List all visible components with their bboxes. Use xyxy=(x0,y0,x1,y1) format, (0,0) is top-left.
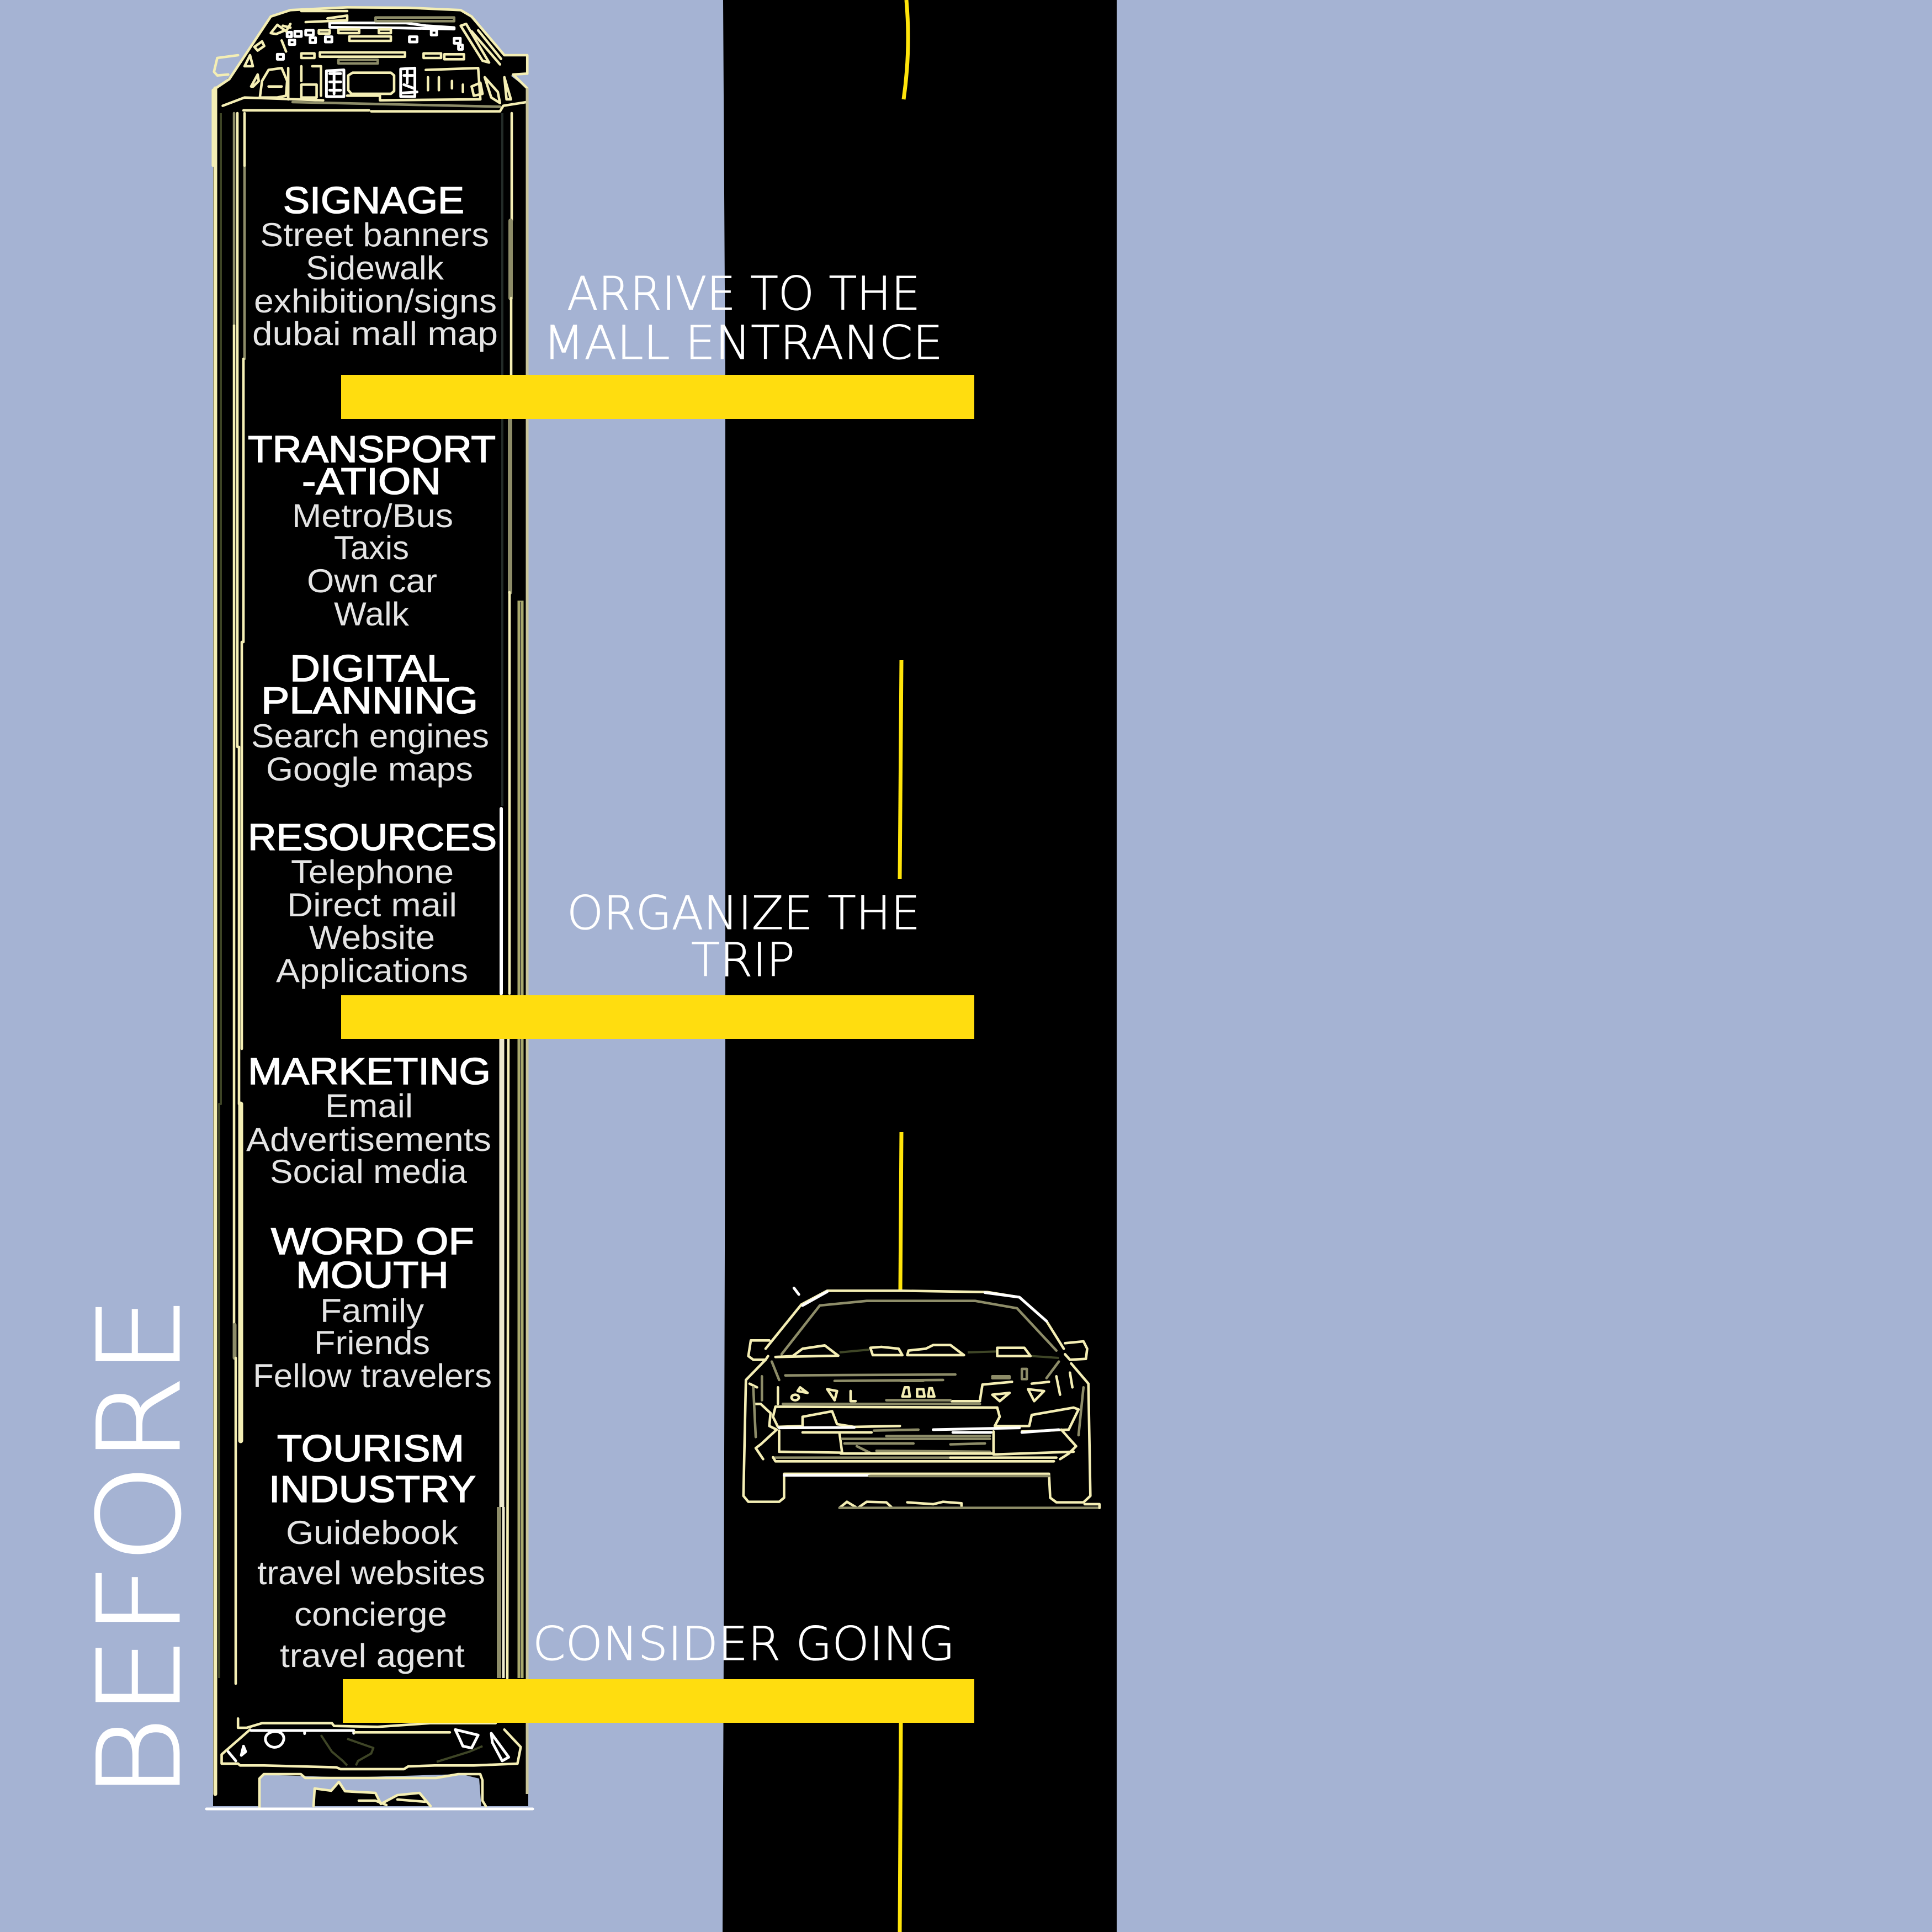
stage label: arrive to the mall entrance: MALL ENTRANCE xyxy=(543,316,943,370)
text block: word of mouth: MOUTH xyxy=(296,1254,449,1296)
text block: word of mouth: Fellow travelers xyxy=(253,1357,492,1394)
text block: signage: Sidewalk xyxy=(306,250,444,286)
text block: resources: Website xyxy=(309,919,435,956)
text block: marketing: Social media xyxy=(270,1153,468,1190)
text block: tourism industry: concierge xyxy=(294,1596,447,1633)
side title: before: BEFORE xyxy=(75,1296,206,1800)
icon: car outline seen from the front xyxy=(744,1288,1100,1508)
text block: resources: RESOURCES xyxy=(248,816,497,858)
text block: resources: Direct mail xyxy=(287,887,457,923)
text block: signage: SIGNAGE xyxy=(283,179,464,221)
stage label: organize the trip: TRIP xyxy=(691,933,795,987)
bus roof and windscreen details xyxy=(213,7,527,166)
text block: marketing: Advertisements xyxy=(246,1121,491,1158)
text block: digital planning: Google maps xyxy=(266,751,473,788)
text block: tourism industry: travel agent xyxy=(280,1637,465,1674)
text block: resources xyxy=(248,816,497,989)
text block: resources: Applications xyxy=(276,952,468,989)
yellow bar: organize xyxy=(341,995,974,1039)
bus ground line xyxy=(206,1807,533,1811)
text block: marketing xyxy=(246,1050,491,1190)
text block: tourism industry: Guidebook xyxy=(286,1514,459,1551)
text block: marketing: MARKETING xyxy=(248,1050,491,1092)
text block: word of mouth: Friends xyxy=(314,1324,430,1361)
text block: word of mouth: WORD OF xyxy=(271,1220,474,1262)
text block: word of mouth xyxy=(253,1220,492,1394)
text block: signage: dubai mall map xyxy=(252,315,498,352)
text block: transportation: Metro/Bus xyxy=(292,497,453,534)
stage label: organize the trip: ORGANIZE THE xyxy=(567,886,920,940)
text block: resources: Telephone xyxy=(291,853,454,890)
text block: digital planning: PLANNING xyxy=(261,680,478,721)
bus side lines xyxy=(215,88,527,1794)
text block: transportation: Walk xyxy=(334,596,410,633)
road centre line: third dash xyxy=(900,1132,901,1292)
yellow bar: arrive xyxy=(341,375,974,419)
text block: transportation: Own car xyxy=(307,562,437,599)
text block: transportation: TRANSPORT xyxy=(248,428,496,470)
text block: tourism industry xyxy=(257,1427,485,1674)
text block: tourism industry: TOURISM xyxy=(277,1427,464,1469)
text block: transportation: Taxis xyxy=(334,529,409,566)
bus body xyxy=(213,7,528,1806)
bus bottom cut-out with ground detail xyxy=(206,1774,533,1809)
text block: transportation xyxy=(248,428,496,633)
road centre line: second dash xyxy=(900,660,901,879)
yellow bar: consider xyxy=(343,1679,974,1723)
road xyxy=(723,0,1117,1932)
stage label: organize the trip xyxy=(567,886,920,987)
text block: signage xyxy=(252,179,498,352)
road centre line: bottom dash xyxy=(900,1722,901,1932)
text block: marketing: Email xyxy=(325,1087,413,1124)
stage label: arrive to the mall entrance xyxy=(543,267,943,370)
text block: tourism industry: INDUSTRY xyxy=(269,1468,476,1510)
text block: digital planning: Search engines xyxy=(251,718,489,755)
bus lower lights and bumper xyxy=(222,1718,521,1769)
stage label: arrive to the mall entrance: ARRIVE TO THE xyxy=(567,267,920,321)
road centre line: top curve xyxy=(904,0,908,99)
text block: transportation: -ATION xyxy=(302,460,441,502)
text block: word of mouth: Family xyxy=(320,1292,424,1329)
stage label: consider going: CONSIDER GOING xyxy=(533,1617,955,1671)
icon: bus outline seen from the front xyxy=(206,7,533,1809)
text block: signage: exhibition/signs xyxy=(254,283,497,320)
text block: tourism industry: travel websites xyxy=(257,1554,485,1591)
text block: signage: Street banners xyxy=(260,216,489,253)
text block: digital planning xyxy=(251,647,489,788)
text block: digital planning: DIGITAL xyxy=(290,647,450,689)
